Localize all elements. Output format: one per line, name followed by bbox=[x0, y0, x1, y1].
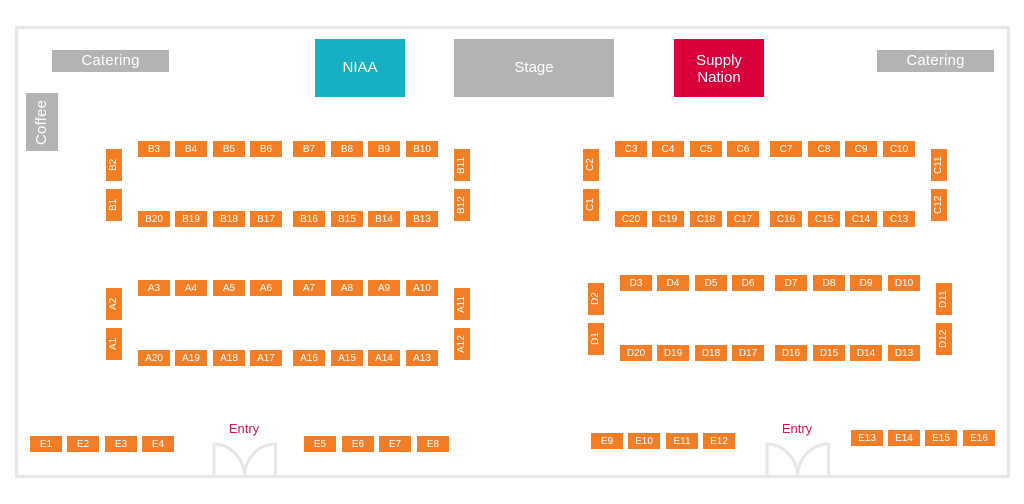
C18 bbox=[690, 211, 722, 227]
D15 bbox=[813, 345, 845, 361]
D8 bbox=[813, 275, 845, 291]
B15 bbox=[331, 211, 363, 227]
C12: C12 bbox=[933, 196, 944, 214]
D13 bbox=[888, 345, 920, 361]
E13: E13 bbox=[858, 433, 876, 444]
E2 bbox=[67, 436, 99, 452]
C9: C9 bbox=[855, 144, 867, 155]
D4: D4 bbox=[667, 278, 679, 289]
D15: D15 bbox=[820, 348, 838, 359]
D19 bbox=[657, 345, 689, 361]
A3 bbox=[138, 280, 170, 296]
B6: B6 bbox=[260, 144, 272, 155]
B14 bbox=[368, 211, 400, 227]
C11 bbox=[931, 149, 947, 181]
D1 bbox=[588, 323, 604, 355]
C4 bbox=[652, 141, 684, 157]
B5: B5 bbox=[223, 144, 235, 155]
A15: A15 bbox=[338, 353, 356, 364]
Supply Nation stand: Supply bbox=[696, 52, 742, 69]
A4 bbox=[175, 280, 207, 296]
B10: B10 bbox=[413, 144, 431, 155]
E12: E12 bbox=[710, 436, 728, 447]
D11: D11 bbox=[938, 290, 949, 308]
C20: C20 bbox=[622, 214, 640, 225]
A18 bbox=[213, 350, 245, 366]
D12: D12 bbox=[938, 330, 949, 348]
B16 bbox=[293, 211, 325, 227]
C17: C17 bbox=[734, 214, 752, 225]
E5: E5 bbox=[314, 439, 326, 450]
E6: E6 bbox=[352, 439, 364, 450]
C13 bbox=[883, 211, 915, 227]
D9 bbox=[850, 275, 882, 291]
D1: D1 bbox=[590, 333, 601, 345]
B10 bbox=[406, 141, 438, 157]
E15 bbox=[925, 430, 957, 446]
B14: B14 bbox=[375, 214, 393, 225]
E11: E11 bbox=[673, 436, 691, 447]
C5: C5 bbox=[700, 144, 712, 155]
A6: A6 bbox=[260, 283, 272, 294]
A2 bbox=[106, 288, 122, 320]
D20: D20 bbox=[627, 348, 645, 359]
C19: C19 bbox=[659, 214, 677, 225]
A20 bbox=[138, 350, 170, 366]
B2 bbox=[106, 149, 122, 181]
entry label left: Entry bbox=[229, 421, 259, 436]
D7: D7 bbox=[785, 278, 797, 289]
E14: E14 bbox=[895, 433, 913, 444]
B19 bbox=[175, 211, 207, 227]
B17 bbox=[250, 211, 282, 227]
icon: entry doors left bbox=[212, 442, 277, 475]
B8 bbox=[331, 141, 363, 157]
catering left: Catering bbox=[81, 52, 140, 69]
A6 bbox=[250, 280, 282, 296]
C18: C18 bbox=[697, 214, 715, 225]
C15: C15 bbox=[815, 214, 833, 225]
D16 bbox=[775, 345, 807, 361]
B20 bbox=[138, 211, 170, 227]
C10: C10 bbox=[890, 144, 908, 155]
A9: A9 bbox=[378, 283, 390, 294]
catering left bbox=[52, 50, 169, 72]
A1: A1 bbox=[108, 338, 119, 350]
A5: A5 bbox=[223, 283, 235, 294]
D6: D6 bbox=[742, 278, 754, 289]
B12 bbox=[454, 189, 470, 221]
C12 bbox=[931, 189, 947, 221]
C3 bbox=[615, 141, 647, 157]
E8 bbox=[417, 436, 449, 452]
C14: C14 bbox=[852, 214, 870, 225]
E12 bbox=[703, 433, 735, 449]
coffee bbox=[26, 93, 58, 151]
NIAA stand bbox=[315, 39, 405, 97]
C7: C7 bbox=[780, 144, 792, 155]
A1 bbox=[106, 328, 122, 360]
C14 bbox=[845, 211, 877, 227]
D7 bbox=[775, 275, 807, 291]
C2 bbox=[583, 149, 599, 181]
E9 bbox=[591, 433, 623, 449]
E10: E10 bbox=[635, 436, 653, 447]
A10 bbox=[406, 280, 438, 296]
C16: C16 bbox=[777, 214, 795, 225]
B9: B9 bbox=[378, 144, 390, 155]
B7: B7 bbox=[303, 144, 315, 155]
C8: C8 bbox=[818, 144, 830, 155]
B20: B20 bbox=[145, 214, 163, 225]
B11: B11 bbox=[456, 156, 467, 174]
B11 bbox=[454, 149, 470, 181]
E16 bbox=[963, 430, 995, 446]
NIAA stand: NIAA bbox=[342, 59, 378, 76]
C13: C13 bbox=[890, 214, 908, 225]
A19: A19 bbox=[182, 353, 200, 364]
B1 bbox=[106, 189, 122, 221]
A11: A11 bbox=[456, 295, 467, 313]
E4: E4 bbox=[152, 439, 164, 450]
E13 bbox=[851, 430, 883, 446]
A12 bbox=[454, 328, 470, 360]
coffee: Coffee bbox=[33, 99, 50, 145]
E1 bbox=[30, 436, 62, 452]
E16: E16 bbox=[970, 433, 988, 444]
A13 bbox=[406, 350, 438, 366]
E2: E2 bbox=[77, 439, 89, 450]
D18: D18 bbox=[702, 348, 720, 359]
E8: E8 bbox=[427, 439, 439, 450]
A10: A10 bbox=[413, 283, 431, 294]
D17 bbox=[732, 345, 764, 361]
A12: A12 bbox=[456, 335, 467, 353]
A15 bbox=[331, 350, 363, 366]
E6 bbox=[342, 436, 374, 452]
E3 bbox=[105, 436, 137, 452]
B12: B12 bbox=[456, 196, 467, 214]
C5 bbox=[690, 141, 722, 157]
C15 bbox=[808, 211, 840, 227]
A14 bbox=[368, 350, 400, 366]
D8: D8 bbox=[823, 278, 835, 289]
E10 bbox=[628, 433, 660, 449]
E11 bbox=[666, 433, 698, 449]
E7: E7 bbox=[389, 439, 401, 450]
B2: B2 bbox=[108, 159, 119, 171]
A13: A13 bbox=[413, 353, 431, 364]
B9 bbox=[368, 141, 400, 157]
D12 bbox=[936, 323, 952, 355]
D3 bbox=[620, 275, 652, 291]
C3: C3 bbox=[625, 144, 637, 155]
C20 bbox=[615, 211, 647, 227]
C1: C1 bbox=[585, 199, 596, 211]
D17: D17 bbox=[739, 348, 757, 359]
D14 bbox=[850, 345, 882, 361]
C6 bbox=[727, 141, 759, 157]
D11 bbox=[936, 283, 952, 315]
C2: C2 bbox=[585, 159, 596, 171]
C8 bbox=[808, 141, 840, 157]
A16 bbox=[293, 350, 325, 366]
B7 bbox=[293, 141, 325, 157]
Supply Nation stand bbox=[674, 39, 764, 97]
A17: A17 bbox=[257, 353, 275, 364]
B4 bbox=[175, 141, 207, 157]
D14: D14 bbox=[857, 348, 875, 359]
C9 bbox=[845, 141, 877, 157]
D2: D2 bbox=[590, 293, 601, 305]
stage bbox=[454, 39, 614, 97]
icon: entry doors right bbox=[766, 442, 830, 475]
C16 bbox=[770, 211, 802, 227]
B1: B1 bbox=[108, 199, 119, 211]
D18 bbox=[695, 345, 727, 361]
D10 bbox=[888, 275, 920, 291]
E14 bbox=[888, 430, 920, 446]
E15: E15 bbox=[932, 433, 950, 444]
B13: B13 bbox=[413, 214, 431, 225]
A7: A7 bbox=[303, 283, 315, 294]
E4 bbox=[142, 436, 174, 452]
C1 bbox=[583, 189, 599, 221]
A14: A14 bbox=[375, 353, 393, 364]
E7 bbox=[379, 436, 411, 452]
D16: D16 bbox=[782, 348, 800, 359]
entry label right: Entry bbox=[782, 421, 812, 436]
D2 bbox=[588, 283, 604, 315]
stage: Stage bbox=[514, 59, 554, 76]
D5: D5 bbox=[705, 278, 717, 289]
D20 bbox=[620, 345, 652, 361]
B15: B15 bbox=[338, 214, 356, 225]
B3 bbox=[138, 141, 170, 157]
B8: B8 bbox=[341, 144, 353, 155]
B5 bbox=[213, 141, 245, 157]
A8 bbox=[331, 280, 363, 296]
A2: A2 bbox=[108, 298, 119, 310]
B13 bbox=[406, 211, 438, 227]
E5 bbox=[304, 436, 336, 452]
B18 bbox=[213, 211, 245, 227]
C17 bbox=[727, 211, 759, 227]
A11 bbox=[454, 288, 470, 320]
catering right: Catering bbox=[906, 52, 965, 69]
B19: B19 bbox=[182, 214, 200, 225]
A18: A18 bbox=[220, 353, 238, 364]
A16: A16 bbox=[300, 353, 318, 364]
A17 bbox=[250, 350, 282, 366]
D13: D13 bbox=[895, 348, 913, 359]
C10 bbox=[883, 141, 915, 157]
B18: B18 bbox=[220, 214, 238, 225]
E1: E1 bbox=[40, 439, 52, 450]
B6 bbox=[250, 141, 282, 157]
C11: C11 bbox=[933, 156, 944, 174]
A9 bbox=[368, 280, 400, 296]
C6: C6 bbox=[737, 144, 749, 155]
A20: A20 bbox=[145, 353, 163, 364]
D19: D19 bbox=[664, 348, 682, 359]
D4 bbox=[657, 275, 689, 291]
D6 bbox=[732, 275, 764, 291]
Supply Nation stand: Nation bbox=[697, 69, 741, 86]
A8: A8 bbox=[341, 283, 353, 294]
B16: B16 bbox=[300, 214, 318, 225]
C4: C4 bbox=[662, 144, 674, 155]
D5 bbox=[695, 275, 727, 291]
B17: B17 bbox=[257, 214, 275, 225]
A5 bbox=[213, 280, 245, 296]
C19 bbox=[652, 211, 684, 227]
B3: B3 bbox=[148, 144, 160, 155]
D10: D10 bbox=[895, 278, 913, 289]
D9: D9 bbox=[860, 278, 872, 289]
A7 bbox=[293, 280, 325, 296]
E3: E3 bbox=[115, 439, 127, 450]
E9: E9 bbox=[601, 436, 613, 447]
C7 bbox=[770, 141, 802, 157]
B4: B4 bbox=[185, 144, 197, 155]
catering right bbox=[877, 50, 994, 72]
D3: D3 bbox=[630, 278, 642, 289]
A3: A3 bbox=[148, 283, 160, 294]
A19 bbox=[175, 350, 207, 366]
A4: A4 bbox=[185, 283, 197, 294]
